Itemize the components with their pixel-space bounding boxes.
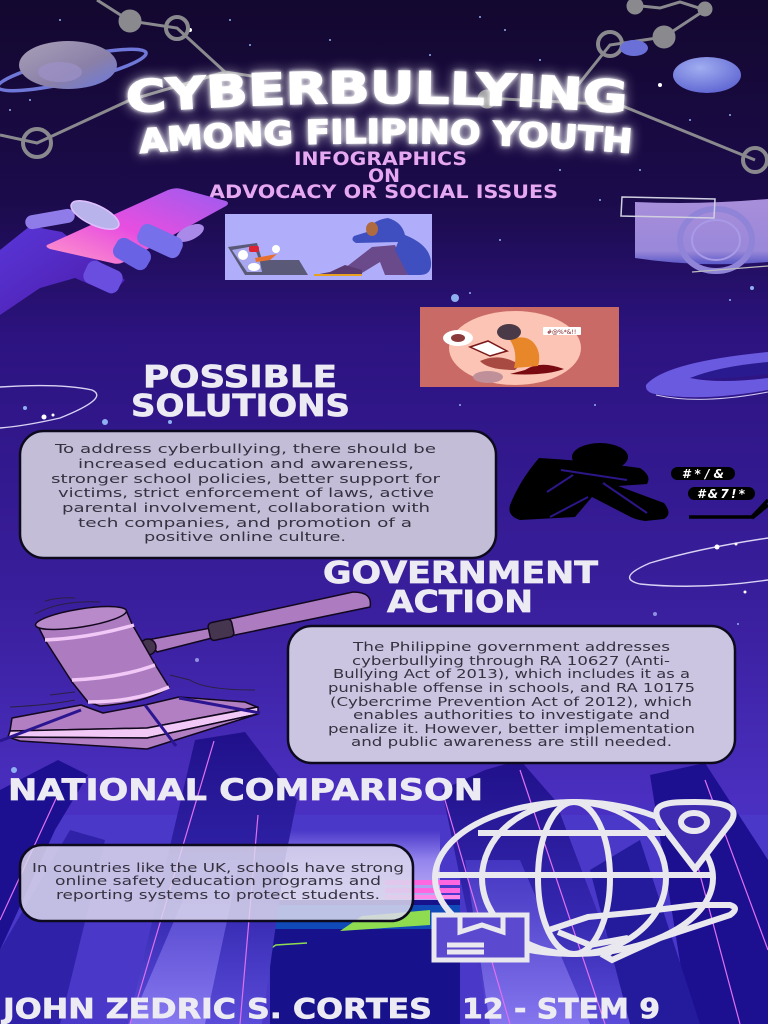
- icon: robotic hand holding phone: [0, 188, 228, 315]
- impact lines: [10, 598, 255, 707]
- panel: national comparison text: reporting systems to protect students.: [56, 887, 380, 902]
- subtitle: ADVOCACY OR SOCIAL ISSUES: [209, 182, 558, 203]
- panel: national comparison text: In countries like the UK, schools have strong: [32, 860, 404, 875]
- location pin: [656, 802, 734, 869]
- heading: possible solutions: [131, 360, 350, 424]
- orbit ring right: [630, 538, 768, 594]
- heading: national comparison: NATIONAL COMPARISON: [8, 773, 483, 807]
- panel: possible solutions text: [20, 431, 496, 558]
- panel: government action text: penalize it. However, better implementation: [328, 721, 695, 736]
- subtitle: ON: [368, 166, 400, 187]
- head: [34, 602, 169, 706]
- orbit ring left: [0, 386, 97, 428]
- panel: possible solutions text: parental involvement, collaboration with: [62, 500, 430, 515]
- panel: government action text: enables authorities to investigate and: [353, 707, 670, 722]
- panel: government action text: [288, 626, 735, 763]
- constellation lines: [0, 0, 767, 172]
- panel: government action text: and public awareness are still needed.: [351, 734, 672, 749]
- hand: [549, 905, 735, 960]
- panel: national comparison text: online safety education programs and: [55, 873, 381, 888]
- footer: author and class: [1, 992, 660, 1024]
- laptop with messages: [228, 243, 308, 275]
- icon: crouching silhouette: [509, 443, 755, 521]
- image: boy reading tablet: [420, 307, 619, 387]
- subtitle: [209, 149, 558, 203]
- icon: globe with pin, box and hand: [434, 802, 735, 960]
- panel: possible solutions text: stronger school policies, better support for: [51, 471, 441, 486]
- panel: holographic screen: [621, 197, 768, 272]
- speech bubbles: #&7!*: [697, 487, 746, 501]
- panel: possible solutions text: positive online culture.: [144, 529, 346, 544]
- image: boy reading tablet: #@%*&!!: [547, 329, 576, 336]
- title: CYBERBULLYING: [118, 60, 634, 122]
- speech bubbles: #*/&: [682, 467, 724, 481]
- globe: [435, 802, 713, 954]
- icon: laptop edge: [689, 500, 768, 518]
- subtitle: INFOGRAPHICS: [294, 149, 467, 170]
- heading: possible solutions: SOLUTIONS: [131, 389, 350, 424]
- image: hooded teen and laptop: [225, 214, 432, 280]
- panel: government action text: (Cybercrime Prevention Act of 2012), which: [330, 694, 692, 709]
- speech bubbles: [671, 467, 755, 501]
- panel: possible solutions text: increased education and awareness,: [78, 456, 414, 471]
- heading: government action: ACTION: [387, 585, 533, 620]
- icon: blue planets: [620, 40, 741, 93]
- handle: [140, 592, 370, 655]
- star field: [9, 16, 754, 773]
- heading: possible solutions: POSSIBLE: [143, 360, 337, 395]
- parcel box: [434, 915, 527, 960]
- icon: ringed planet: [0, 41, 149, 99]
- panel: possible solutions text: tech companies, and promotion of a: [78, 515, 412, 530]
- icon: gavel: [0, 592, 370, 749]
- sound block: [0, 697, 260, 749]
- chat bubbles: [238, 245, 280, 271]
- panel: possible solutions text: victims, strict enforcement of laws, active: [58, 485, 434, 500]
- panel: government action text: punishable offense in schools, and RA 10175: [328, 680, 695, 695]
- heading: government action: GOVERNMENT: [323, 556, 599, 591]
- title: [118, 60, 640, 162]
- city skyline: [0, 732, 768, 1024]
- panel: government action text: The Philippine government addresses: [352, 639, 670, 654]
- heading: government action: [323, 556, 599, 620]
- panel: government action text: cyberbullying through RA 10627 (Anti-: [352, 653, 670, 668]
- icon: purple ring: [646, 352, 768, 399]
- hooded figure: [314, 218, 431, 276]
- panel: government action text: Bullying Act of 2013), which includes it as a: [333, 666, 690, 681]
- title: AMONG FILIPINO YOUTH: [132, 109, 640, 162]
- panel: possible solutions text: To address cyberbullying, there should be: [54, 441, 436, 456]
- panel: national comparison text: [20, 845, 413, 921]
